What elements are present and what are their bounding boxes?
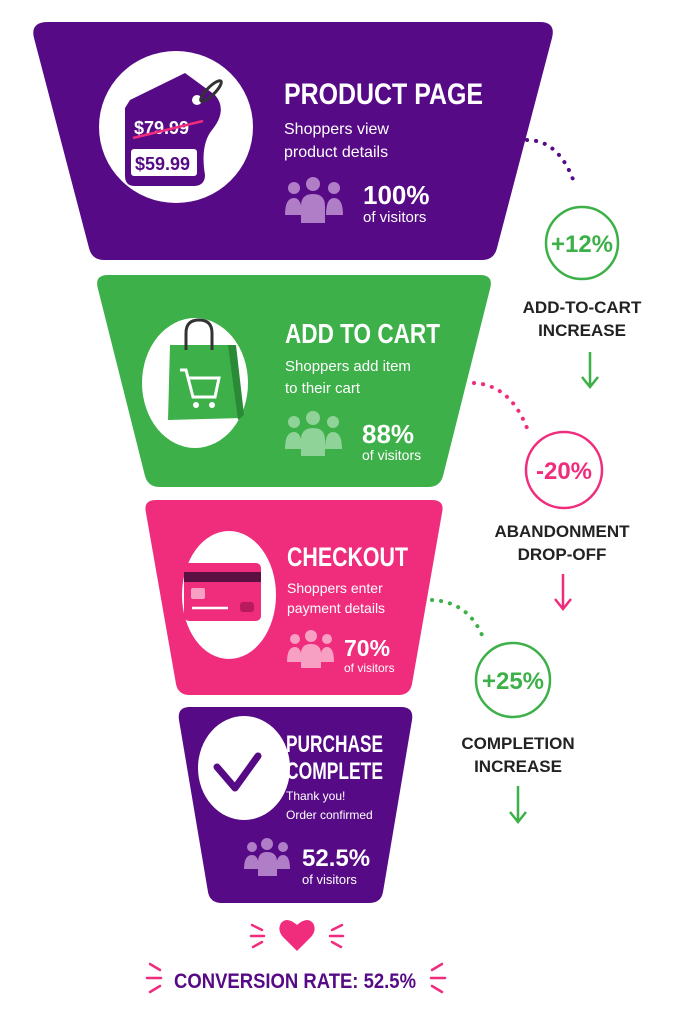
stat: 100%: 100% (363, 180, 430, 210)
callout: +12%: +12% (551, 231, 613, 258)
callout: +12% (523, 140, 642, 387)
text: description: Shoppers enter (287, 580, 383, 596)
heading: purchase complete: PURCHASE (286, 731, 383, 758)
heading: add to cart: ADD TO CART (285, 318, 440, 349)
text: description: Shoppers add item (285, 358, 411, 375)
panel: checkout (145, 500, 443, 695)
stat: 88%: 88% (362, 419, 414, 449)
icon: shopping bag (142, 318, 248, 448)
text: description: Order confirmed (286, 808, 373, 822)
callout: +12%: INCREASE (538, 321, 626, 340)
heading: checkout: CHECKOUT (287, 542, 408, 572)
icon: people (244, 838, 290, 876)
panel: purchase complete: of visitors (302, 872, 357, 887)
icon: price tag: $79.99 (134, 118, 189, 138)
callout: -20%: DROP-OFF (518, 545, 606, 564)
callout: -20% (474, 383, 630, 609)
text: description: payment details (287, 600, 385, 616)
text: description: to their cart (285, 380, 361, 397)
icon: check mark (198, 716, 290, 820)
icon: price tag: $59.99 (135, 154, 190, 174)
panel: purchase complete: COMPLETE (286, 758, 383, 785)
panel: add to cart (97, 275, 491, 487)
callout: +25%: COMPLETION (461, 734, 575, 753)
callout: -20%: ABANDONMENT (494, 522, 630, 541)
callout: -20%: -20% (536, 458, 592, 485)
heading: product page: PRODUCT PAGE (284, 78, 483, 111)
icon: people (287, 630, 334, 668)
callout: +12%: ADD-TO-CART (523, 298, 642, 317)
text: description: Thank you! (286, 789, 345, 803)
callout: +25%: INCREASE (474, 757, 562, 776)
icon: heart (251, 920, 343, 951)
panel: product page (33, 22, 553, 260)
panel: product page: of visitors (363, 209, 426, 226)
panel: checkout: of visitors (344, 661, 395, 675)
panel: purchase complete (179, 707, 412, 903)
stat: 52.5%: 52.5% (302, 845, 370, 872)
callout: +25%: +25% (482, 668, 544, 695)
icon: credit card (182, 531, 276, 659)
icon: people (285, 411, 342, 456)
text: description: Shoppers view (284, 121, 389, 138)
text: description: product details (284, 144, 388, 161)
icon: people (285, 177, 343, 223)
icon: price tag (99, 51, 253, 203)
panel: add to cart: of visitors (362, 447, 421, 463)
callout: +25% (432, 600, 575, 822)
stat: 70%: 70% (344, 635, 390, 661)
text: conversion rate: CONVERSION RATE: 52.5% (174, 970, 416, 993)
